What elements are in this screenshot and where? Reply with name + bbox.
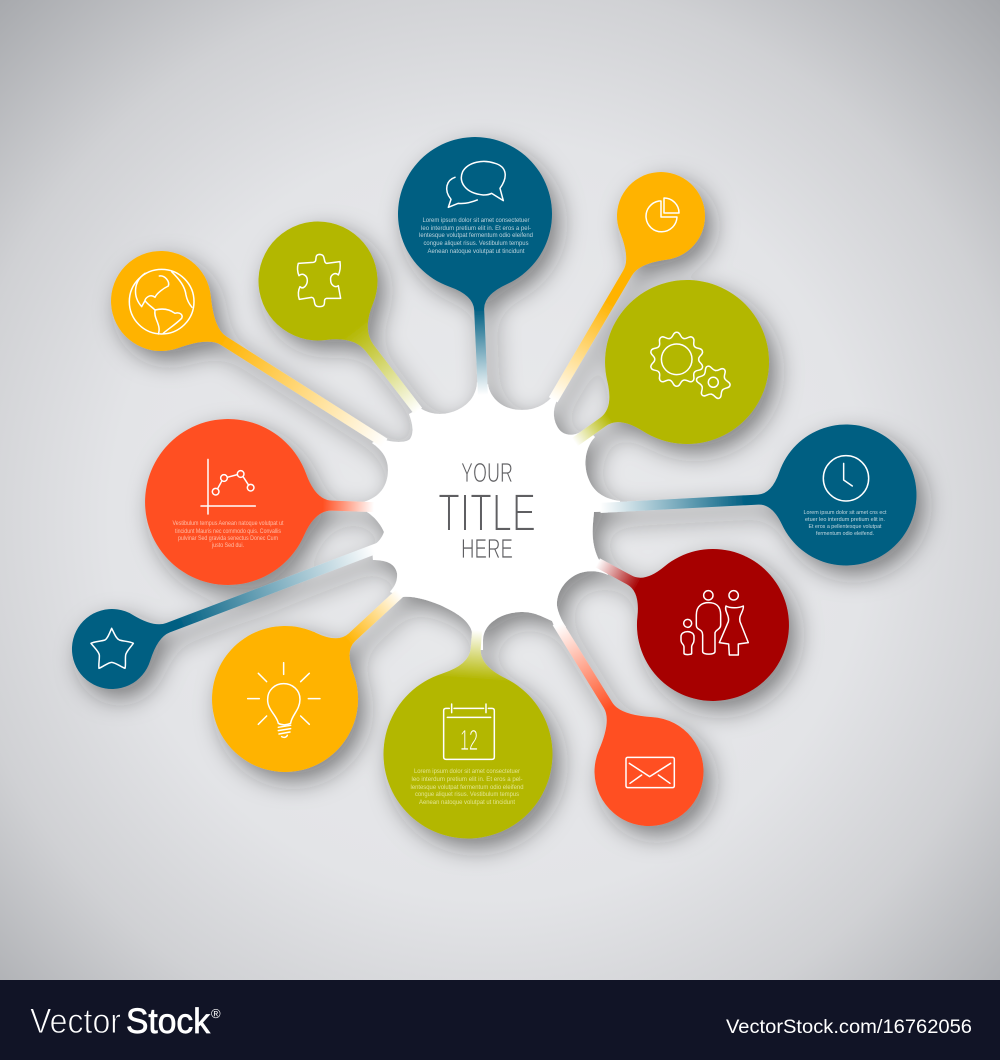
footer bar [0, 980, 1000, 1060]
text: line chart: Vestibulum tempus Aenean natoque volutpat ut [172, 520, 284, 527]
text: clock [804, 510, 887, 537]
logo: VectorStock: ® [211, 1006, 221, 1021]
logo: VectorStock: Vector [30, 1002, 121, 1041]
icon: star [91, 628, 133, 668]
title: YOUR [461, 457, 513, 488]
icon: envelope [626, 757, 674, 788]
title [438, 457, 536, 564]
text: calendar: Aenean natoque volutpat ut tincidunt [419, 799, 515, 806]
icon: family [681, 591, 748, 655]
text: line chart: pulvinar Sed gravida senectus Donec Cum [178, 535, 278, 542]
icon: light bulb [248, 663, 320, 737]
text: clock: fermentum odio eleifend. [816, 531, 874, 537]
icon text: calendar day: 12 [460, 725, 478, 757]
text: speech bubble [419, 217, 533, 255]
title: TITLE [438, 483, 536, 543]
bubble: calendar [378, 624, 561, 844]
bubble: line chart [142, 416, 378, 590]
text: speech bubble: lentesque volutpat fermentum odio eleifend [419, 232, 533, 239]
text: speech bubble: leo interdum pretium elit in. Et eros a pel- [421, 225, 531, 232]
text: clock: Et eros a pellentesque volutpat [808, 524, 882, 530]
icon: pie chart [646, 198, 679, 232]
icon: globe [129, 269, 194, 334]
icon: puzzle piece [298, 254, 341, 307]
diagram shapes: central hub with twelve bubbles [60, 134, 920, 847]
text: speech bubble: Aenean natoque volutpat ut tincidunt [428, 248, 525, 255]
bubble: globe [92, 232, 412, 485]
icon: speech bubbles [447, 161, 505, 207]
bubble: pie chart [515, 156, 721, 422]
title: HERE [461, 533, 513, 564]
text: line chart [172, 520, 284, 549]
bubble: speech [395, 134, 560, 398]
footer image id: VectorStock.com/16762056 [726, 1016, 972, 1038]
text: calendar: lentesque volutpat fermentum odio eleifend [410, 784, 524, 791]
icon: gears [649, 332, 736, 404]
bubble: family [562, 496, 816, 728]
bubble: puzzle [235, 198, 465, 447]
text: clock: etuer leo interdum pretium elit in. [805, 517, 885, 523]
logo: VectorStock [30, 1002, 221, 1041]
text: calendar: leo interdum pretium elit in. Et eros a pel- [412, 776, 522, 783]
logo: VectorStock: Stock [126, 1002, 210, 1041]
bubble: star [60, 510, 394, 701]
text: speech bubble: Lorem ipsum dolor sit amet consectetuer [422, 217, 530, 224]
text: calendar [410, 768, 524, 806]
bubble: envelope [511, 594, 724, 847]
text: speech bubble: congue aliquet risus. Vestibulum tempus [424, 240, 529, 247]
text: calendar: Lorem ipsum dolor sit amet consectetuer [414, 768, 521, 775]
central white hub [363, 382, 620, 650]
bubble: light bulb [182, 540, 449, 802]
bubble: clock [597, 421, 920, 578]
icon: clock [823, 456, 869, 501]
icon: calendar [444, 704, 494, 759]
text: line chart: tincidunt Mauris nec commodo quis. Convallis [175, 528, 282, 535]
text: clock: Lorem ipsum dolor sit amet cns ect [804, 510, 887, 516]
text: calendar: congue aliquet risus. Vestibulum tempus [415, 791, 520, 798]
bubble: gears [527, 248, 801, 509]
text: line chart: justo Sed dui. [211, 542, 244, 549]
icon: line chart [201, 459, 255, 514]
